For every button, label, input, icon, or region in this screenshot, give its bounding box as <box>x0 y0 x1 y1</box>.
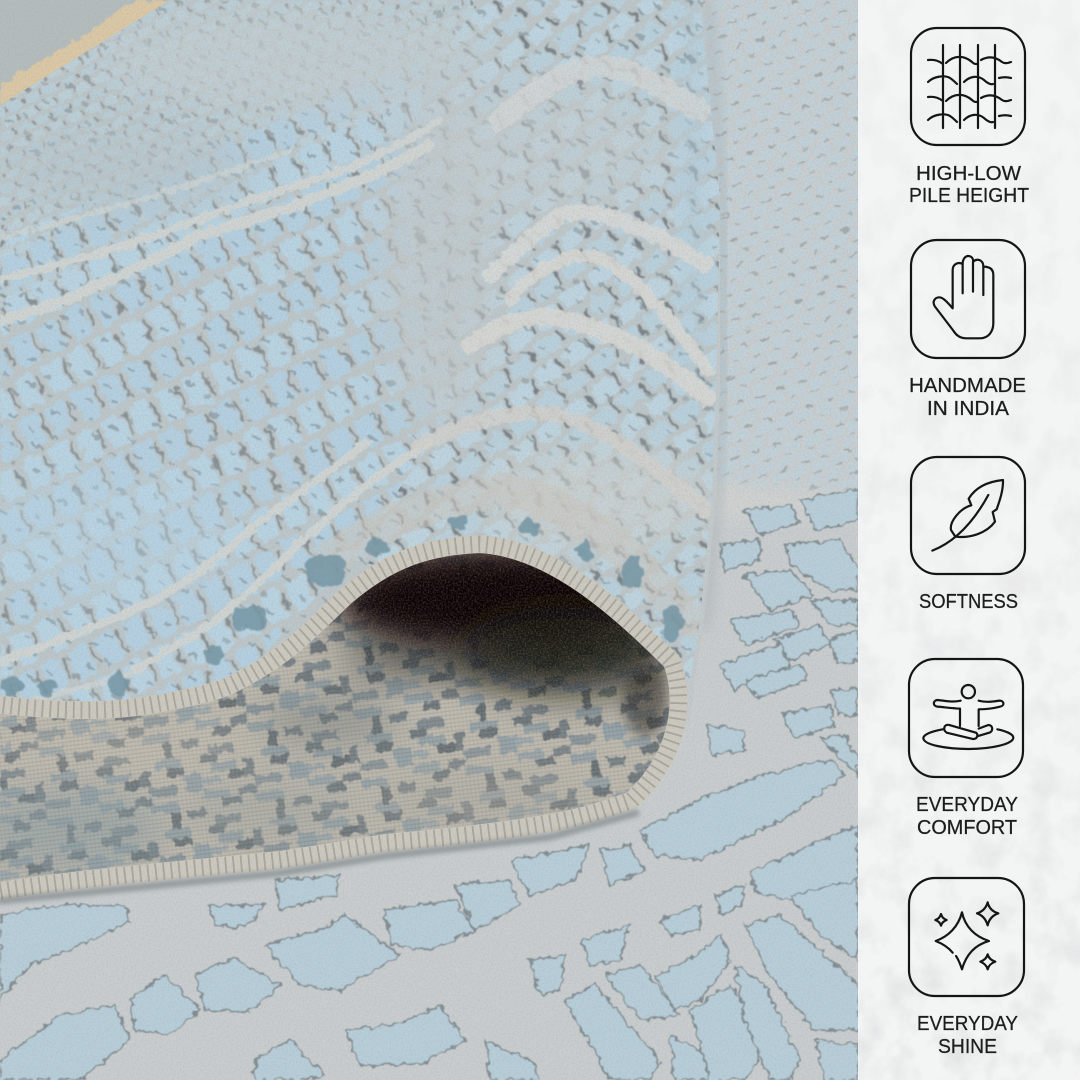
rug top surface <box>0 0 730 720</box>
label: SOFTNESS <box>919 591 1018 613</box>
carpet grain texture <box>0 0 860 1080</box>
adjacent grey rug corner <box>0 0 180 110</box>
feature: everyday shine <box>909 878 1024 1058</box>
roll shadow <box>705 0 722 630</box>
feature: everyday comfort <box>909 659 1023 839</box>
dark specks <box>0 0 730 720</box>
far floor pale band <box>716 480 818 492</box>
rolled selvedge edge <box>0 544 679 901</box>
icon: feather in rounded square <box>911 457 1025 574</box>
rolled section pattern <box>340 0 730 700</box>
blue-grey shade patches <box>0 694 590 872</box>
soft highlight and shade <box>0 0 715 610</box>
icon: seated meditation figure in rounded square <box>909 659 1023 777</box>
label: COMFORT <box>917 817 1017 839</box>
icon: sparkles in rounded square <box>909 878 1024 996</box>
elongated pattern, lower plane <box>0 60 460 720</box>
woven blue blocks on floor <box>0 490 858 1080</box>
fine pattern, upper plane <box>0 0 476 327</box>
dark interior of the curl <box>335 544 670 736</box>
tan rug fringe <box>0 0 172 110</box>
icon: hand in rounded square <box>911 240 1025 358</box>
label: HANDMADE <box>909 375 1026 397</box>
label: EVERYDAY <box>916 794 1018 816</box>
beige woven stripes <box>0 67 708 720</box>
label: HIGH-LOW <box>916 163 1021 185</box>
fine weave <box>0 610 670 880</box>
label: EVERYDAY <box>917 1013 1018 1035</box>
rug underside <box>0 553 670 882</box>
label: IN INDIA <box>927 398 1010 420</box>
icon: pile weave in rounded square <box>911 28 1025 145</box>
woven block motif <box>0 556 670 882</box>
feature: handmade in India <box>909 240 1026 420</box>
label: SHINE <box>938 1036 997 1058</box>
feature: softness <box>911 457 1025 613</box>
feature: high-low pile height <box>909 28 1029 207</box>
fine pattern on far floor <box>700 0 858 490</box>
label: PILE HEIGHT <box>909 185 1029 207</box>
panel: white marble feature column <box>858 0 1080 1080</box>
dark blue worn patches along the edge <box>0 516 682 696</box>
